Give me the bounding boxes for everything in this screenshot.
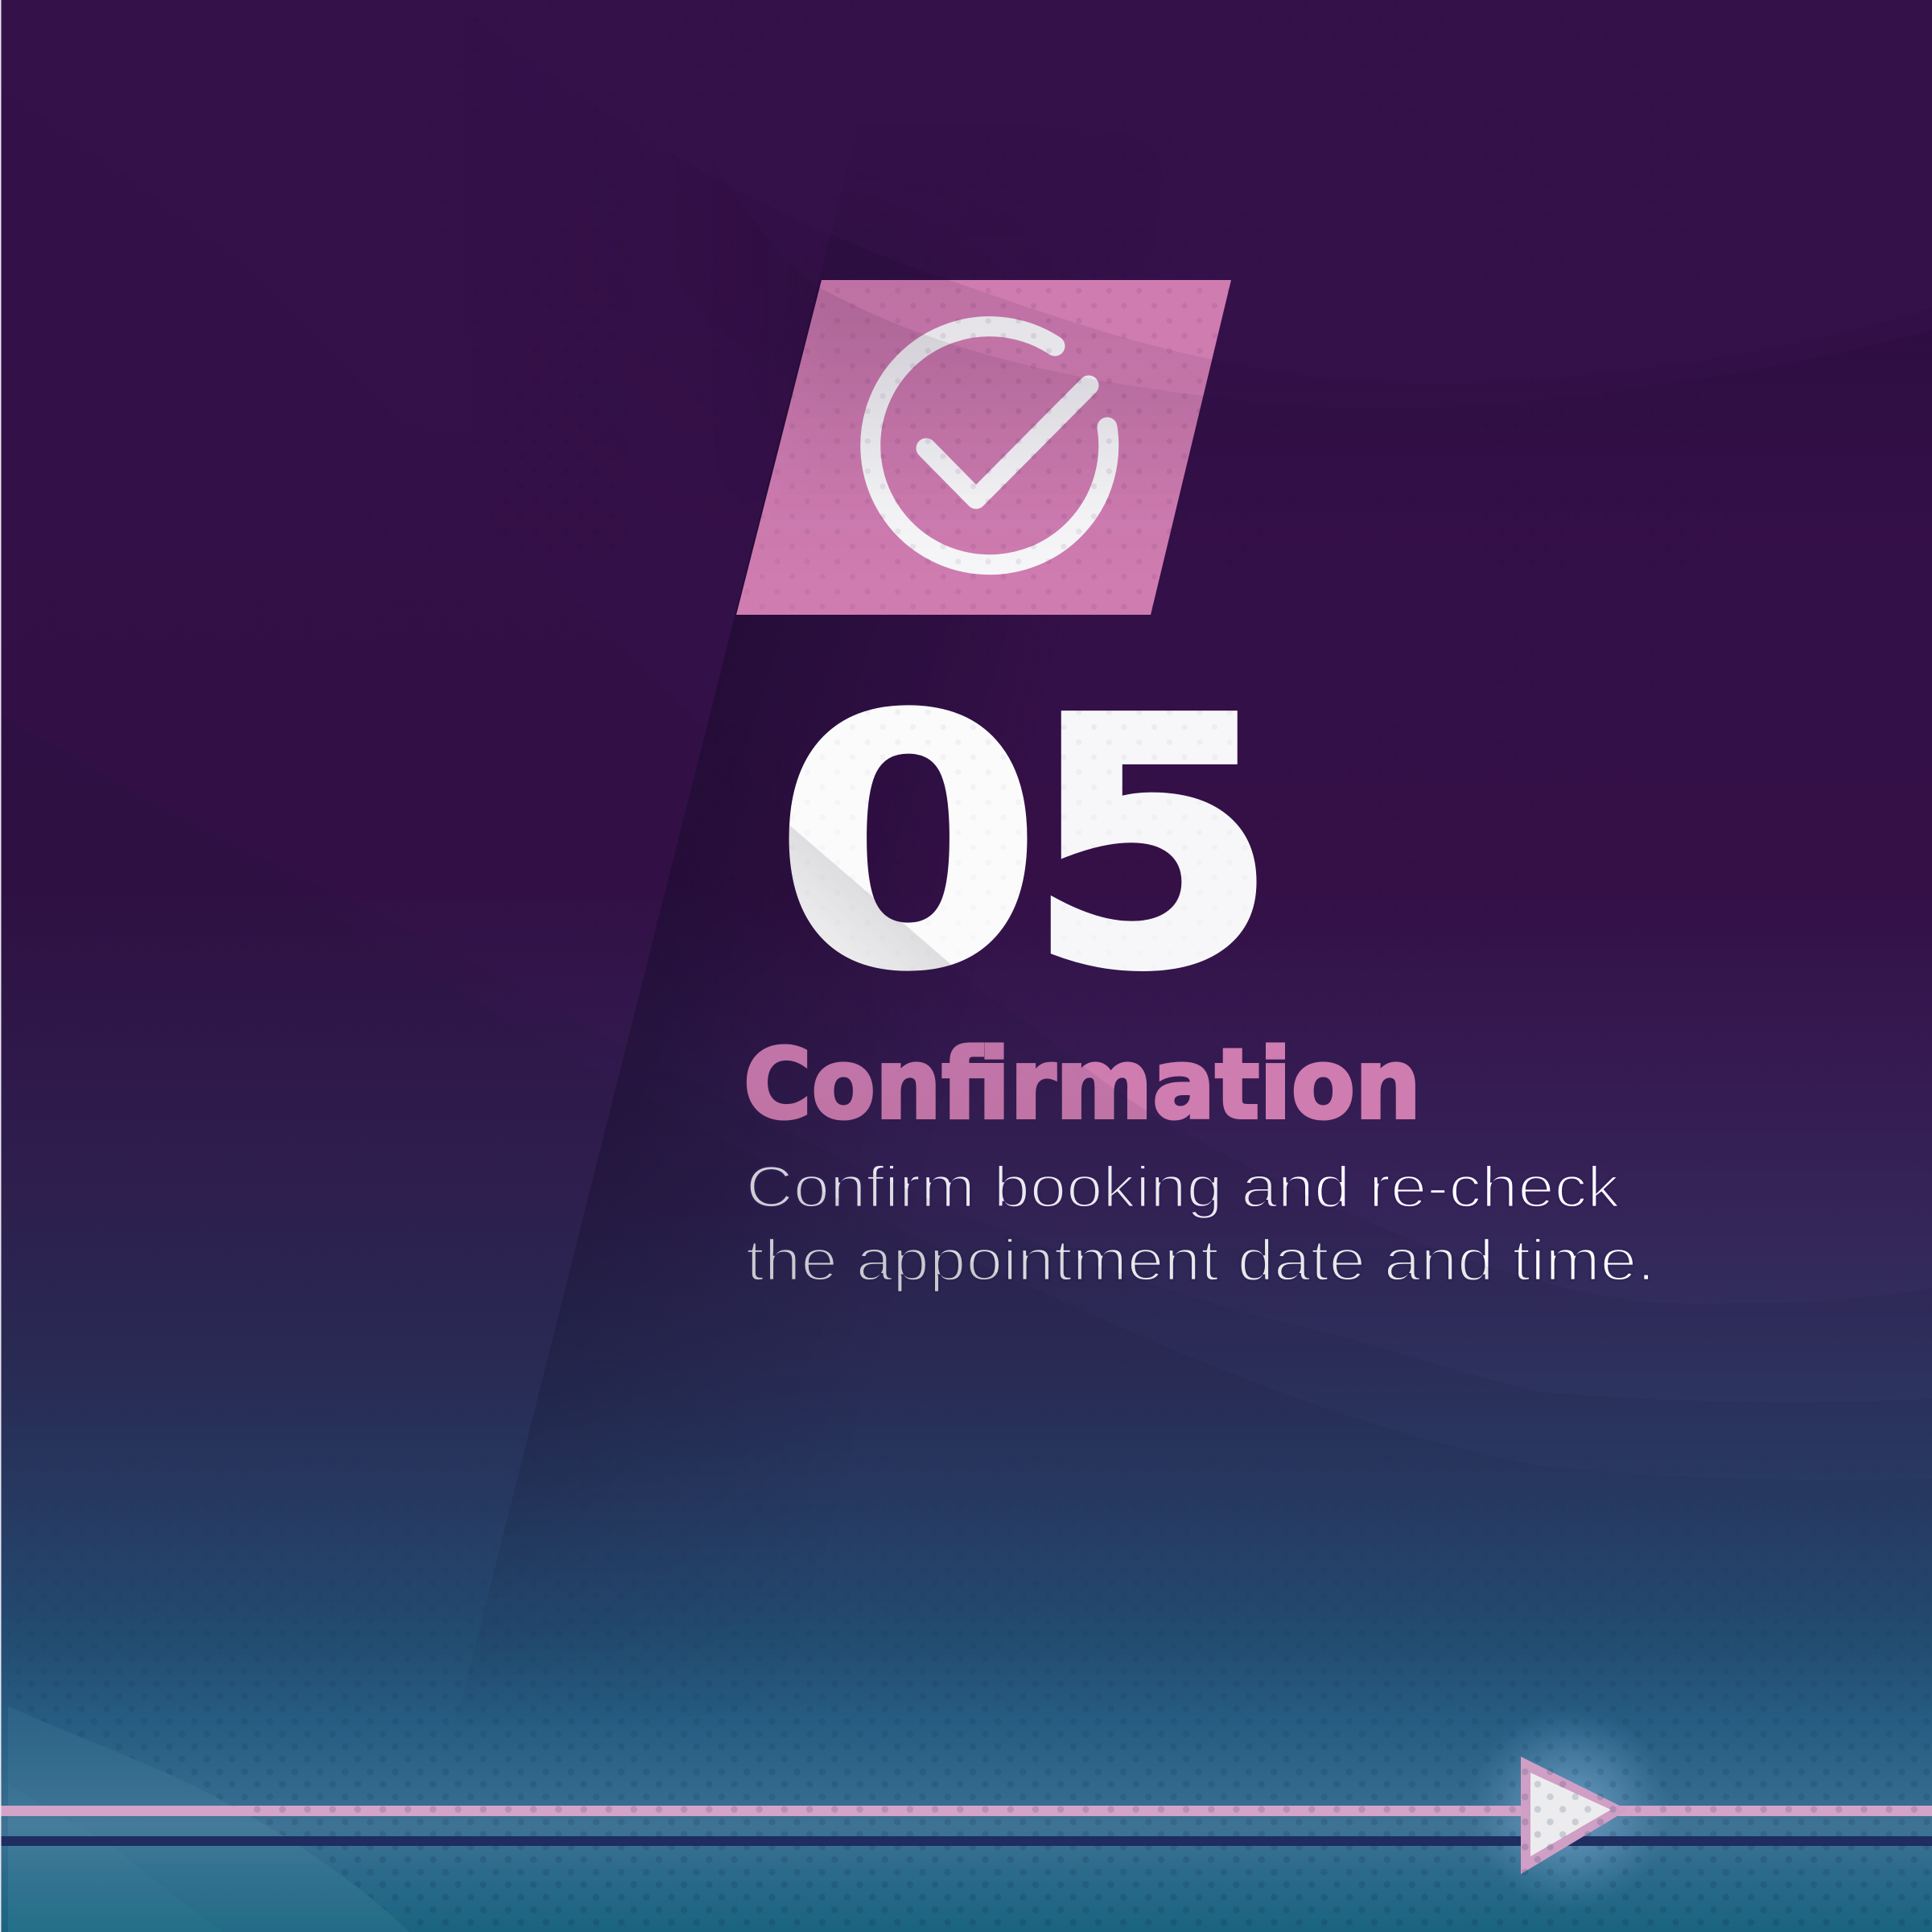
curved shadow band, lower (0, 715, 1932, 1730)
arrow inner triangle (1530, 1773, 1611, 1856)
icon: check mark (926, 385, 1089, 499)
timeline: pink line (0, 1806, 1932, 1816)
icon tile: parallelogram (736, 280, 1231, 615)
description line 1: Confirm booking and re-check (746, 1155, 1621, 1220)
bottom left inner curve (8, 1784, 223, 1932)
arrow marker (1521, 1757, 1628, 1874)
digit 0: 0 (772, 643, 1044, 1045)
curved shadow band, top right lower (795, 288, 1203, 443)
dot texture, upper (760, 288, 1233, 803)
arrow glow (1469, 1708, 1670, 1909)
description line 2: the appointment date and time. (746, 1229, 1655, 1293)
description text (746, 1155, 1655, 1293)
icon: check mark in circle (871, 327, 1109, 565)
left edge line (0, 0, 2, 1932)
digit 5: 5 (1026, 647, 1279, 1044)
bottom left light curve (8, 1706, 410, 1932)
timeline: navy line (0, 1836, 1932, 1846)
curved shadow band, middle (0, 715, 1932, 1730)
heading: Confirmation: Confirmation (744, 1029, 1421, 1141)
dot texture, lower (117, 1731, 1930, 1926)
background ribbon shadow (501, 362, 908, 1543)
icon: open circle ring (871, 327, 1109, 565)
arrow outer triangle (1521, 1757, 1628, 1874)
curved shadow band, top right upper (782, 280, 1212, 469)
step number 05 (772, 643, 1279, 1045)
